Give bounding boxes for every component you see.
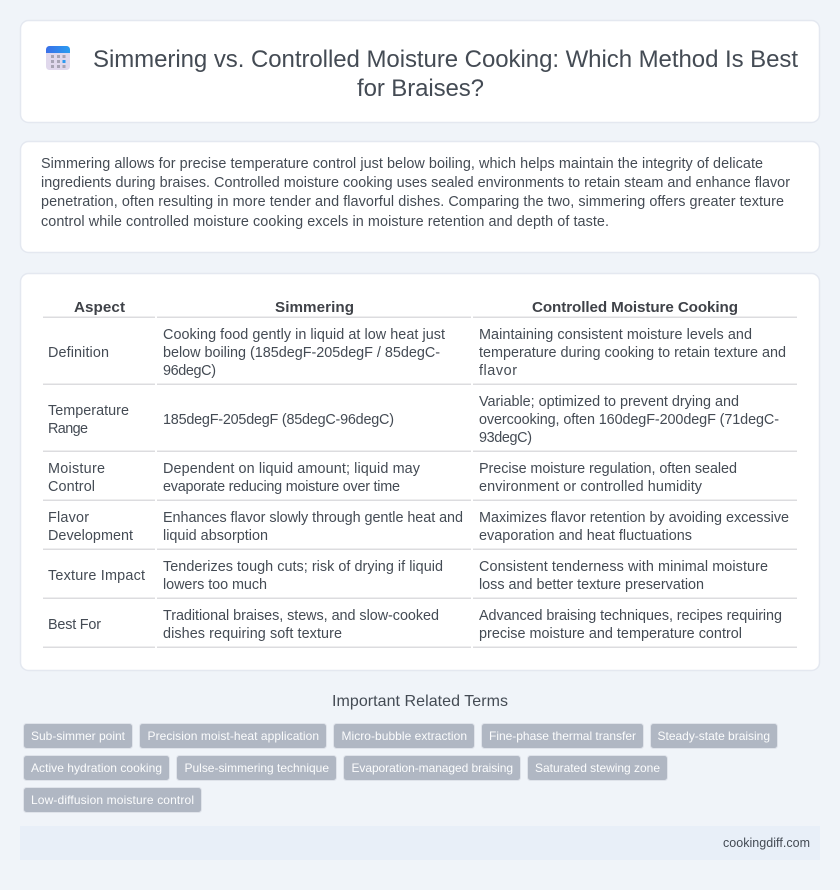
panel: header bbox=[20, 20, 820, 122]
row: definition: temperature during cooking to retain texture and bbox=[479, 345, 786, 361]
tag list: related terms: Evaporation-managed braising bbox=[352, 761, 513, 775]
row: best for: dishes requiring soft texture bbox=[163, 626, 342, 642]
panel: comparison table bbox=[20, 274, 820, 670]
panel: introduction paragraph bbox=[20, 142, 820, 252]
title: Simmering vs. Controlled Moisture Cooking: Which Method Is Best bbox=[93, 46, 798, 73]
table header row: Aspect bbox=[74, 299, 125, 316]
row: temperature range: Variable; optimized to prevent drying and bbox=[479, 394, 739, 410]
row: temperature range: Range bbox=[48, 421, 88, 437]
row: flavor development: Flavor bbox=[48, 510, 89, 526]
text block: introduction: Simmering allows for precise temperature control just below boiling, which helps maintain the integrity of delicate bbox=[41, 156, 763, 172]
row: temperature range bbox=[48, 394, 779, 446]
row: texture impact: Texture Impact bbox=[48, 568, 145, 584]
row: best for: Best For bbox=[48, 617, 101, 633]
row: texture impact: loss and better texture preservation bbox=[479, 577, 704, 593]
row: definition: below boiling (185degF-205degF / 85degC- bbox=[163, 345, 440, 361]
row: moisture control: environment or controlled humidity bbox=[479, 479, 703, 495]
row: definition: Cooking food gently in liquid at low heat just bbox=[163, 327, 445, 343]
row: definition: flavor bbox=[479, 363, 517, 379]
row: temperature range: Temperature bbox=[48, 403, 129, 419]
row: best for: Traditional braises, stews, and slow-cooked bbox=[163, 608, 439, 624]
text block: introduction bbox=[41, 156, 790, 230]
table header row bbox=[74, 299, 738, 316]
tag list: related terms: Fine-phase thermal transfer bbox=[489, 729, 636, 743]
row: flavor development: Development bbox=[48, 528, 133, 544]
row: moisture control: Precise moisture regulation, often sealed bbox=[479, 461, 737, 477]
row: flavor development: evaporation and heat fluctuations bbox=[479, 528, 692, 544]
tag list: related terms: Precision moist-heat application bbox=[148, 729, 319, 743]
row: flavor development: liquid absorption bbox=[163, 528, 268, 544]
row: moisture control bbox=[48, 461, 737, 495]
row: moisture control: Dependent on liquid amount; liquid may bbox=[163, 461, 421, 477]
tag list: related terms: Low-diffusion moisture control bbox=[31, 793, 194, 807]
footer bbox=[20, 826, 820, 860]
row: best for bbox=[48, 608, 782, 642]
row: definition: 96degC) bbox=[163, 363, 216, 379]
row: texture impact: Consistent tenderness with minimal moisture bbox=[479, 559, 768, 575]
icon: calendar bbox=[46, 46, 70, 70]
row: definition: Maintaining consistent moisture levels and bbox=[479, 327, 752, 343]
row: moisture control: Control bbox=[48, 479, 95, 495]
heading: important related terms: Important Related Terms bbox=[332, 693, 508, 710]
title bbox=[93, 46, 798, 102]
row: moisture control: evaporate reducing moisture over time bbox=[163, 479, 400, 495]
row: flavor development bbox=[48, 510, 789, 544]
row: texture impact: Tenderizes tough cuts; risk of drying if liquid bbox=[163, 559, 443, 575]
row: definition bbox=[48, 327, 786, 379]
row: texture impact: lowers too much bbox=[163, 577, 267, 593]
table header row: Controlled Moisture Cooking bbox=[532, 299, 738, 316]
row: moisture control: Moisture bbox=[48, 461, 105, 477]
row: flavor development: Enhances flavor slowly through gentle heat and bbox=[163, 510, 463, 526]
tag list: related terms: Micro-bubble extraction bbox=[342, 729, 467, 743]
tag list: related terms: Pulse-simmering technique bbox=[184, 761, 329, 775]
tag list: related terms bbox=[24, 724, 778, 812]
row: best for: precise moisture and temperature control bbox=[479, 626, 742, 642]
text block: introduction: penetration, often resulting in more tender and flavorful dishes. Comparing the two, simmering offers greater texture bbox=[41, 194, 784, 210]
table header row: Simmering bbox=[275, 299, 354, 316]
tag list: related terms: Active hydration cooking bbox=[31, 761, 162, 775]
title: for Braises? bbox=[357, 75, 484, 102]
tag list: related terms: Steady-state braising bbox=[658, 729, 770, 743]
tag list: related terms: Saturated stewing zone bbox=[535, 761, 660, 775]
tag list: related terms: Sub-simmer point bbox=[31, 729, 126, 743]
row: best for: Advanced braising techniques, recipes requiring bbox=[479, 608, 782, 624]
row: texture impact bbox=[48, 559, 768, 593]
row: definition: Definition bbox=[48, 345, 109, 361]
text block: introduction: control while controlled moisture cooking excels in moisture retention and depth of taste. bbox=[41, 214, 609, 230]
row: temperature range: 185degF-205degF (85degC-96degC) bbox=[163, 412, 394, 428]
row: flavor development: Maximizes flavor retention by avoiding excessive bbox=[479, 510, 789, 526]
row: temperature range: overcooking, often 160degF-200degF (71degC- bbox=[479, 412, 779, 428]
row: temperature range: 93degC) bbox=[479, 430, 532, 446]
text block: introduction: ingredients during braises. Controlled moisture cooking uses sealed environments to retain steam and enhance flavor bbox=[41, 175, 790, 191]
footer: cookingdiff.com bbox=[723, 836, 810, 850]
